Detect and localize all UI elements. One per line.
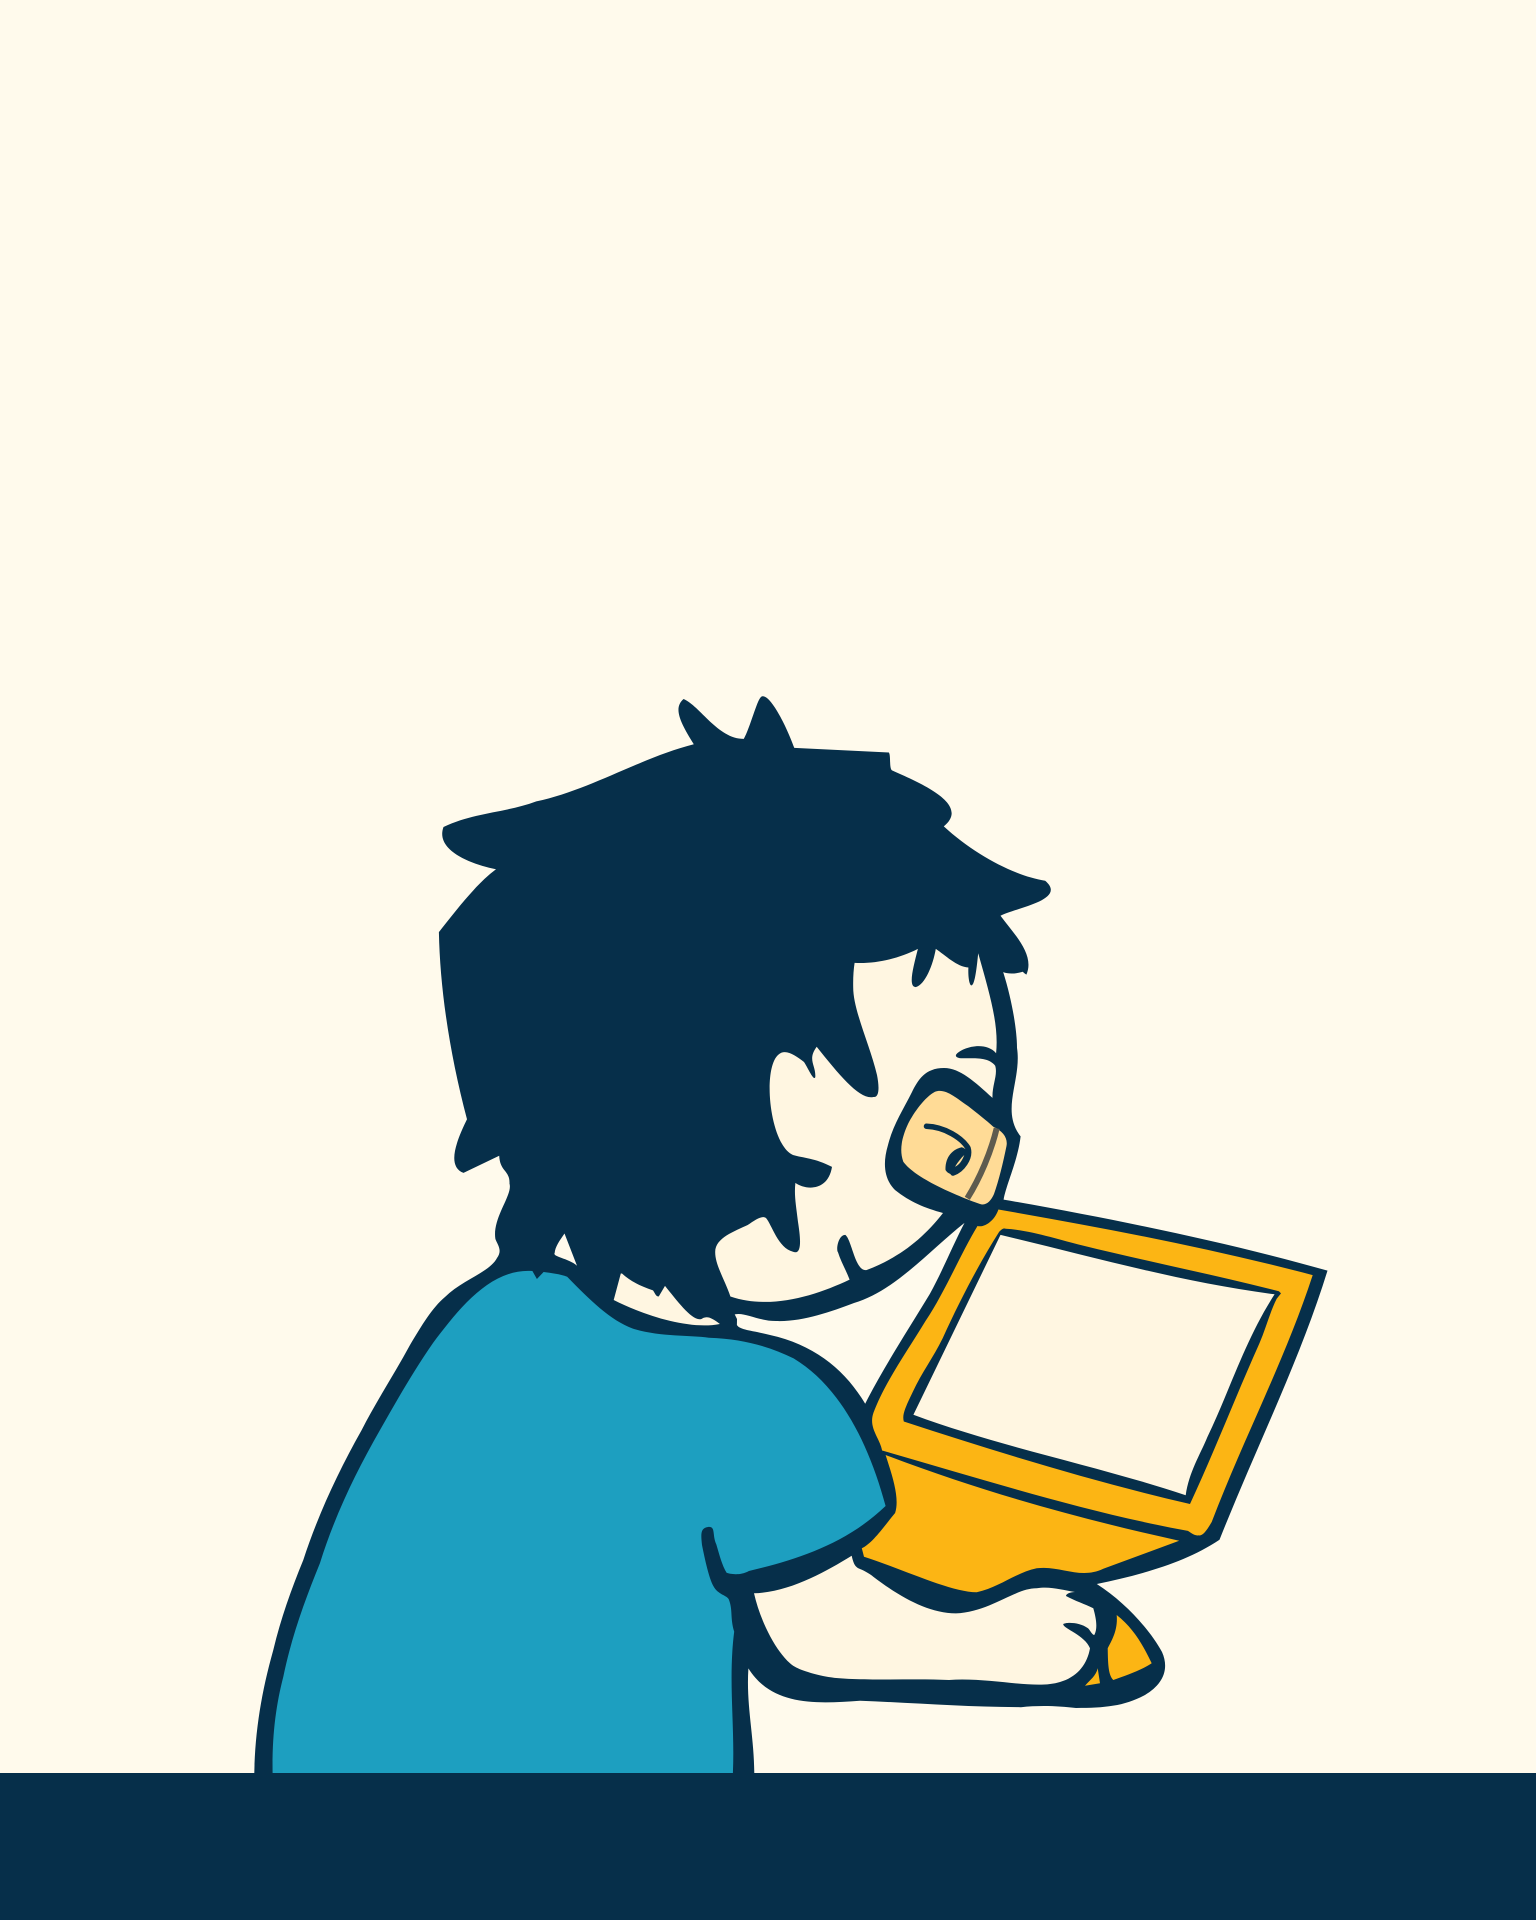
yellow sliver under hand	[1085, 1668, 1100, 1686]
gap between jaw, shoulder and laptop	[735, 1223, 964, 1404]
laptop frame	[872, 1210, 1313, 1535]
eye stroke	[926, 1126, 969, 1173]
silhouette: hair and outline	[254, 696, 1327, 1773]
eye loop	[945, 1147, 969, 1174]
laptop screen	[913, 1235, 1275, 1495]
neck patch	[614, 1274, 720, 1325]
laptop	[862, 1210, 1313, 1592]
glasses lens	[901, 1091, 1007, 1204]
ground bar	[0, 1773, 1536, 1920]
forearm and hand	[754, 1556, 1096, 1685]
glasses temple strap	[967, 1128, 997, 1198]
laptop base	[862, 1455, 1179, 1592]
shirt	[273, 1271, 886, 1773]
yellow gap behind hand	[1108, 1615, 1152, 1680]
figure: person reading a laptop	[254, 696, 1327, 1773]
eye	[926, 1126, 969, 1174]
face	[715, 949, 997, 1302]
laptop bezel	[903, 1228, 1281, 1504]
ear notch	[554, 1234, 577, 1266]
eye highlight	[955, 1155, 964, 1167]
